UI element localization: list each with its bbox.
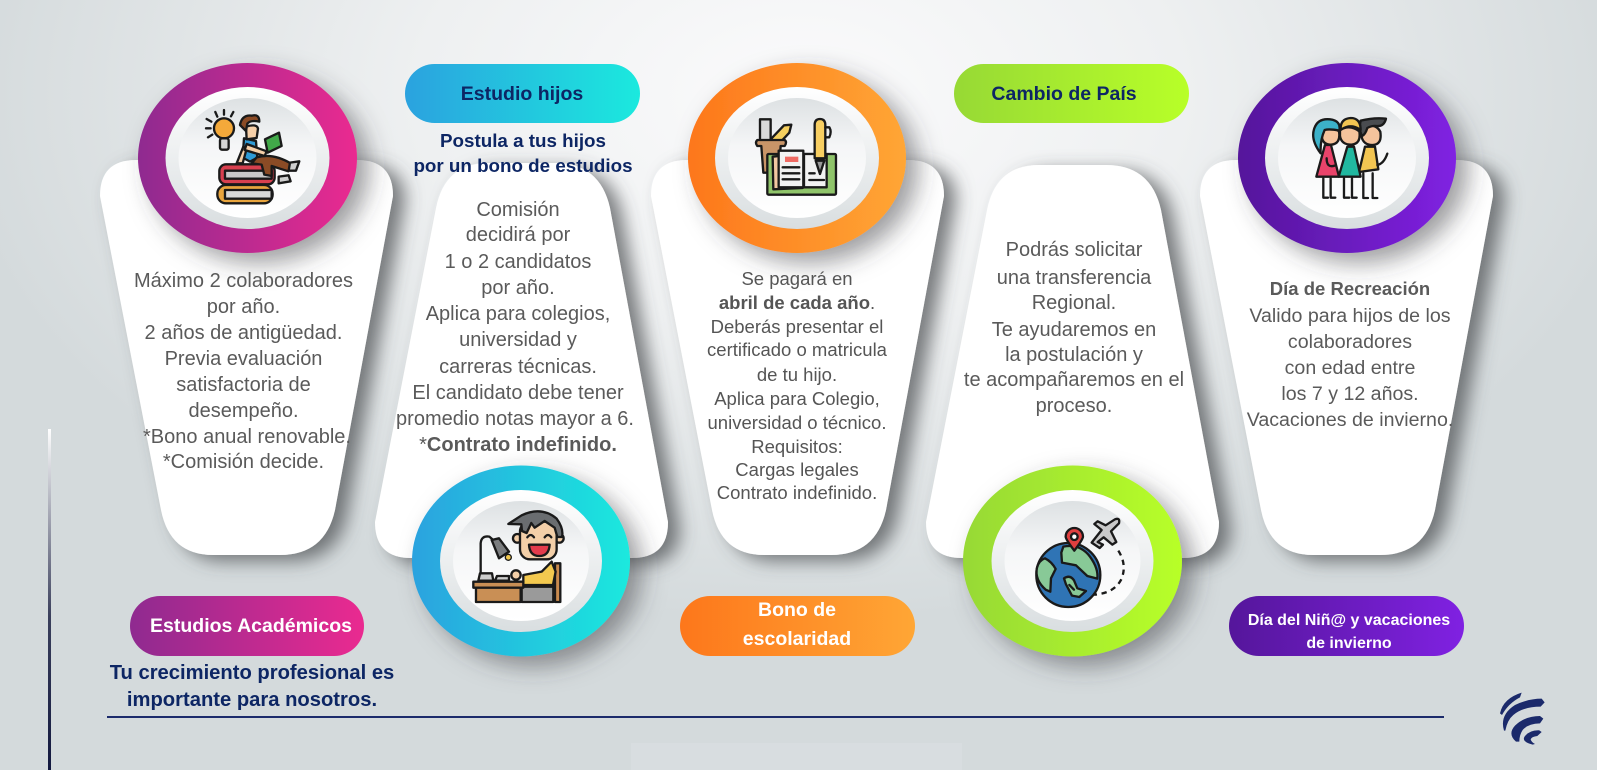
text: dia del nino: los 7 y 12 años.	[1281, 383, 1419, 405]
heading: tu crecimiento profesional	[110, 662, 394, 711]
text: estudios academicos: Previa evaluación	[165, 348, 322, 370]
text: dia del nino: Vacaciones de invierno.	[1247, 409, 1453, 431]
heading: postula a tus hijos: Postula a tus hijos	[440, 130, 606, 151]
text: bono de escolaridad: certificado o matricula	[707, 339, 888, 360]
icon: student reading on books	[206, 110, 299, 203]
text: estudios academicos: desempeño.	[188, 400, 299, 422]
pill: dia del nino	[1229, 596, 1464, 656]
text: estudio hijos: Aplica para colegios,	[426, 303, 610, 325]
text: cambio de pais: una transferencia	[997, 267, 1152, 289]
badge: cambio de pais	[963, 466, 1182, 656]
badge: bono de escolaridad	[688, 63, 906, 253]
pill: cambio de pais	[954, 64, 1189, 123]
text: estudio hijos: por año.	[481, 277, 555, 299]
text: estudio hijos: universidad y	[459, 329, 577, 351]
text: bono de escolaridad	[707, 268, 888, 503]
text: bono de escolaridad: Deberás presentar el	[711, 316, 883, 337]
icon: boy at desk	[473, 511, 564, 602]
text: estudios academicos: por año.	[207, 296, 280, 318]
text: bono de escolaridad: Se pagará en	[741, 268, 853, 289]
text: cambio de pais	[964, 239, 1184, 417]
panel: cambio de pais card	[926, 165, 1219, 558]
pill: estudio hijos	[405, 64, 640, 123]
text: bono de escolaridad: Contrato indefinido.	[717, 482, 877, 503]
text: estudios academicos: *Comisión decide.	[163, 451, 324, 473]
panel: estudios academicos card	[100, 160, 393, 555]
text: estudio hijos: carreras técnicas.	[439, 356, 597, 378]
text: bono de escolaridad: Cargas legales	[735, 459, 859, 480]
panel: dia del nino card	[1200, 160, 1493, 555]
heading: postula a tus hijos: por un bono de estudios	[413, 155, 633, 176]
pill: dia del nino: Día del Niñ@ y vacaciones	[1248, 612, 1450, 629]
pill: estudios academicos: Estudios Académicos	[150, 615, 352, 637]
text: dia del nino: colaboradores	[1288, 331, 1412, 353]
text: estudio hijos	[396, 199, 634, 456]
pill: bono de escolaridad	[680, 596, 915, 656]
text: estudio hijos: *Contrato indefinido.	[419, 434, 617, 456]
text: dia del nino: Día de Recreación	[1270, 278, 1430, 299]
text: bono de escolaridad: de tu hijo.	[757, 364, 837, 385]
text: cambio de pais: Regional.	[1032, 292, 1116, 314]
text: estudios academicos	[134, 270, 353, 473]
text: cambio de pais: Te ayudaremos en	[992, 319, 1156, 341]
text: estudio hijos: decidirá por	[466, 224, 571, 246]
badge: estudio hijos	[412, 466, 630, 656]
text: estudio hijos: 1 o 2 candidatos	[445, 251, 591, 273]
left vertical line	[48, 429, 51, 770]
panel: bono de escolaridad card	[651, 160, 944, 555]
text: estudio hijos: El candidato debe tener	[412, 382, 624, 404]
text: bono de escolaridad: abril de cada año.	[719, 292, 875, 313]
text: cambio de pais: proceso.	[1036, 395, 1112, 417]
text: bono de escolaridad: universidad o técnico.	[708, 412, 886, 433]
icon: book, pen and pencil cup	[756, 119, 836, 195]
faint footer rectangle	[631, 743, 962, 770]
bottom rule	[107, 716, 1444, 718]
pill: estudio hijos: Estudio hijos	[461, 83, 583, 105]
icon: three children	[1313, 118, 1387, 198]
text: cambio de pais: la postulación y	[1005, 344, 1143, 366]
text: bono de escolaridad: Requisitos:	[751, 436, 843, 457]
text: estudio hijos: promedio notas mayor a 6.	[396, 408, 634, 430]
pill: dia del nino: de invierno	[1306, 635, 1392, 652]
heading: postula a tus hijos	[413, 130, 633, 176]
text: dia del nino: con edad entre	[1285, 357, 1415, 379]
heading: tu crecimiento profesional: importante para nosotros.	[127, 689, 377, 711]
badge: dia del nino	[1238, 63, 1456, 253]
badge: estudios academicos	[138, 63, 357, 253]
text: dia del nino: Valido para hijos de los	[1249, 305, 1451, 327]
pill: bono de escolaridad: Bono de	[758, 599, 836, 621]
text: estudios academicos: satisfactoria de	[176, 374, 311, 396]
pill: cambio de pais: Cambio de País	[991, 83, 1137, 105]
text: cambio de pais: te acompañaremos en el	[964, 369, 1184, 391]
text: bono de escolaridad: Aplica para Colegio,	[714, 388, 880, 409]
text: estudio hijos: Comisión	[476, 199, 560, 221]
pill: bono de escolaridad: escolaridad	[743, 628, 851, 650]
text: estudios academicos: *Bono anual renovable.	[143, 426, 351, 448]
text: dia del nino	[1247, 278, 1453, 431]
icon: company logo	[1500, 693, 1545, 745]
icon: globe with pin and plane	[1036, 519, 1124, 607]
heading: tu crecimiento profesional: Tu crecimiento profesional es	[110, 662, 394, 684]
text: cambio de pais: Podrás solicitar	[1006, 239, 1143, 261]
panel: estudio hijos card	[375, 163, 668, 558]
pill: estudios academicos	[130, 596, 364, 656]
text: estudios academicos: 2 años de antigüedad.	[145, 322, 342, 344]
text: estudios academicos: Máximo 2 colaboradores	[134, 270, 353, 292]
